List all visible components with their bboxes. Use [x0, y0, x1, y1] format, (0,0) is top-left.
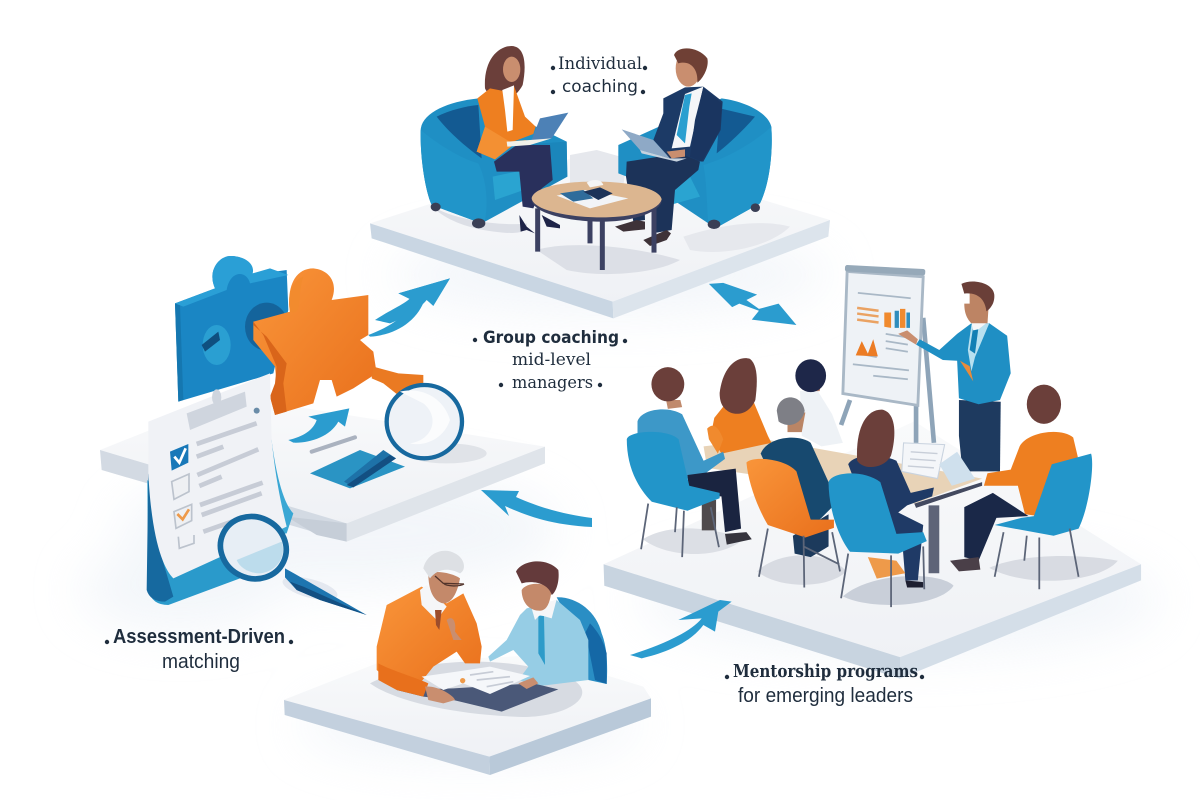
label: mentorship programs for emerging leaders: for emerging leaders: [738, 685, 913, 707]
platform: individual coaching: [370, 150, 830, 318]
arrow: to group coaching: [630, 600, 732, 658]
arrow: to group coaching: [375, 278, 450, 323]
arrow: group coaching to assessment: [481, 490, 592, 527]
attendee woman orange: [707, 358, 771, 454]
scene: group coaching: [604, 265, 1141, 679]
platform: assessment: [100, 397, 545, 542]
label: individual coaching: Individual: [558, 54, 642, 74]
label: individual coaching: [551, 54, 647, 97]
checklist clipboard: [147, 373, 293, 605]
shared document: [397, 667, 558, 712]
label: assessment-driven matching: matching: [162, 651, 240, 673]
attendee woman navy: [848, 410, 934, 587]
flipchart with charts: [841, 265, 934, 443]
attendee grey hair navy: [761, 397, 832, 557]
label: individual coaching: coaching: [562, 77, 638, 97]
platform: mentorship: [283, 655, 651, 775]
attendee right orange and chair: [950, 385, 1092, 589]
mentor in orange: [377, 551, 482, 687]
scene: mentorship programs: [283, 551, 732, 775]
label: group coaching mid-level managers: mid-level: [512, 350, 591, 370]
coffee table: [532, 180, 662, 270]
document bars: [312, 437, 355, 452]
magnifying glass on clipboard: [210, 506, 367, 615]
orange puzzle piece: [253, 268, 423, 415]
label: assessment-driven matching: [105, 626, 293, 673]
right armchair: [618, 98, 772, 229]
scene: individual coaching: [370, 46, 830, 323]
presenter: [898, 282, 1011, 471]
foreground blue chair: [829, 473, 927, 607]
arrow: between individual and group coaching: [709, 283, 796, 325]
mentor forearm and hand: [378, 663, 455, 703]
label: group coaching mid-level managers: managers: [512, 373, 593, 393]
arrow: assessment to group coaching: [368, 278, 450, 337]
label: group coaching mid-level managers: Group coaching: [483, 328, 619, 348]
man with laptop: [615, 48, 723, 246]
scene: assessment-driven matching: [100, 256, 545, 615]
blue puzzle piece: [175, 256, 288, 402]
magnifying glass on platform: [344, 385, 462, 487]
label: mentorship programs for emerging leaders: [725, 661, 924, 707]
blue folder: [310, 450, 405, 488]
orange chair: [746, 459, 840, 587]
label: assessment-driven matching: Assessment-Driven: [113, 626, 285, 648]
meeting table: [704, 439, 982, 573]
platform: group coaching: [604, 421, 1141, 679]
left armchair: [421, 98, 567, 228]
mentee with chair: [488, 561, 607, 686]
small arrow: [288, 408, 349, 443]
label: mentorship programs for emerging leaders: Mentorship programs: [733, 661, 918, 682]
woman with tablet: [477, 46, 568, 233]
attendee left and blue chair: [627, 367, 752, 557]
label: group coaching mid-level managers: [473, 328, 627, 393]
attendee dark hair back: [795, 359, 843, 446]
